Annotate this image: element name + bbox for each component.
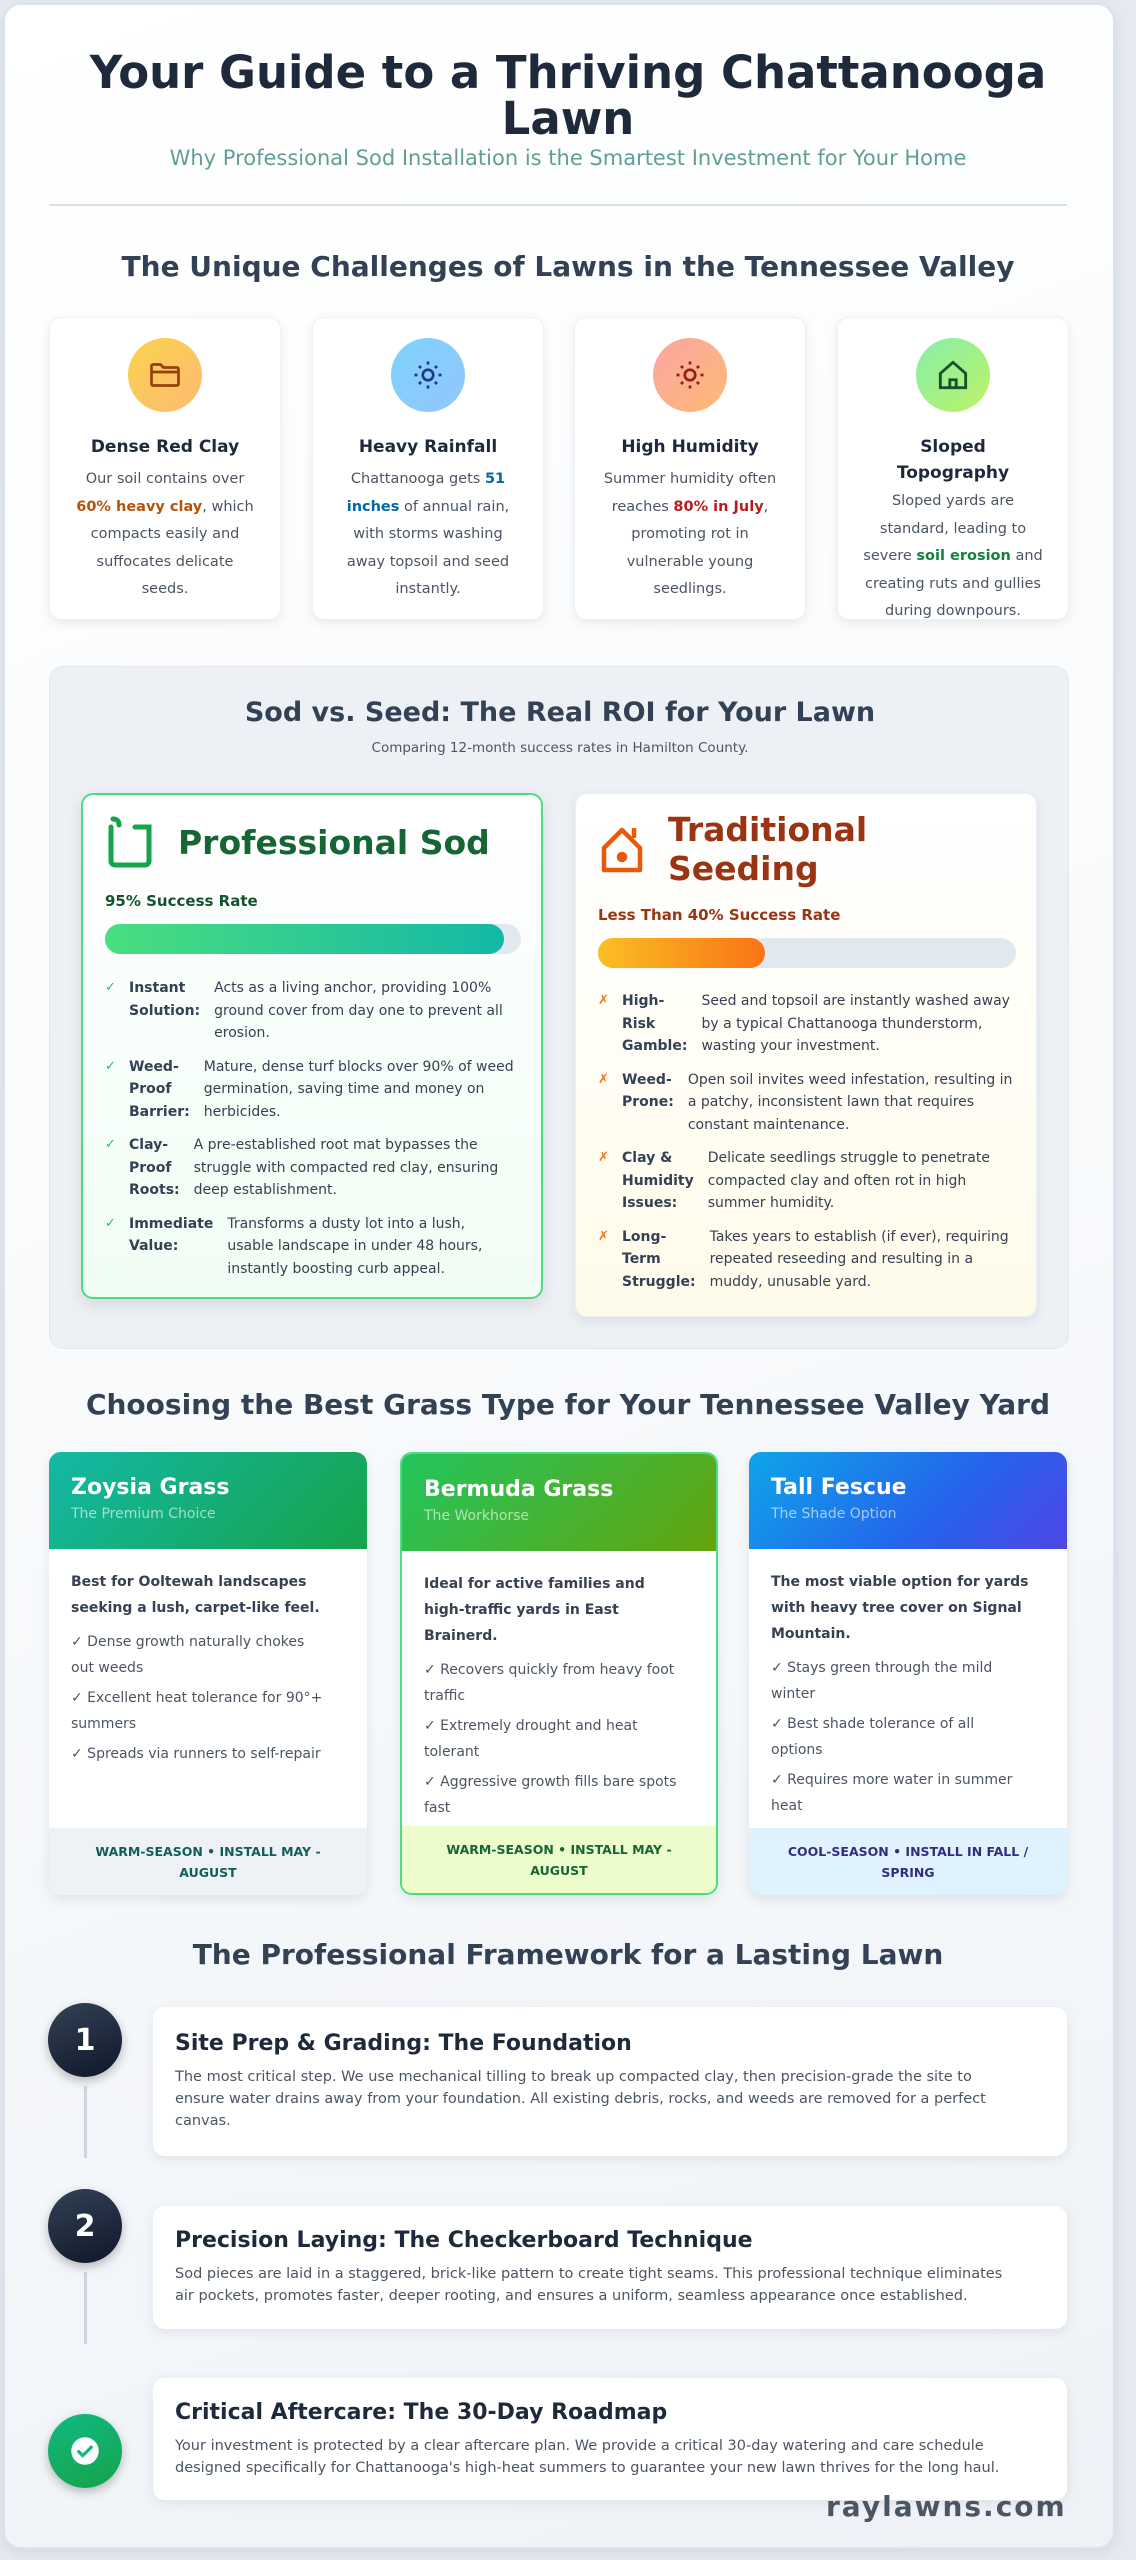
card: dense red clay: Our soil contains over 60% heavy clay, which compacts easily and suffocates delicate seeds.: [76, 471, 254, 597]
step 3 card: Critical Aftercare: The 30-Day Roadmap: [175, 2400, 667, 2425]
step 2 card: Sod pieces are laid in a staggered, brick-like pattern to create tight seams. This professional technique eliminates air pockets, promotes faster, deeper rooting, and ensures a uniform, seamless appearance once established.: [175, 2266, 1002, 2304]
title: [89, 46, 1046, 145]
card: professional sod: [81, 793, 543, 1299]
card: traditional seeding: [575, 793, 1037, 1317]
card: tall fescue: Tall Fescue: [771, 1475, 907, 1500]
sod list: Acts as a living anchor, providing 100% ground cover from day one to prevent all erosion.: [214, 980, 503, 1041]
card: tall fescue: The Shade Option: [771, 1506, 897, 1522]
seeding list: Struggle:: [622, 1274, 696, 1290]
card: bermuda: Ideal for active families and high-traffic yards in East Brainerd.: [424, 1576, 645, 1644]
sod bar: [105, 924, 521, 954]
sod list: ✓: [105, 1137, 116, 1152]
sod list: ✓: [105, 980, 116, 995]
step 3 card: Your investment is protected by a clear aftercare plan. We provide a critical 30-day watering and care schedule designed specifically for Chattanooga's high-heat summers to guarantee your new lawn thrives for the long haul.: [175, 2438, 999, 2476]
title: Lawn: [502, 92, 634, 145]
sod list: Immediate: [129, 1216, 213, 1232]
seeding list: Open soil invites weed infestation, resulting in a patchy, inconsistent lawn that requires constant maintenance.: [688, 1072, 1012, 1132]
card: zoysia: ✓ Dense growth naturally chokes out weeds: [71, 1634, 304, 1676]
brand: raylawns.com: [826, 2490, 1067, 2523]
sod rate: 95% Success Rate: [105, 892, 258, 910]
card: high humidity: [574, 317, 806, 620]
card: zoysia: ✓ Spreads via runners to self-repair: [71, 1746, 321, 1762]
heading: sod vs seed: Sod vs. Seed: The Real ROI for Your Lawn: [245, 697, 875, 728]
card: high humidity: Summer humidity often reaches 80% in July, promoting rot in vulnerable young seedlings.: [604, 471, 776, 597]
sod list: Weed-: [129, 1058, 179, 1074]
title: Your Guide to a Thriving Chattanooga: [90, 46, 1046, 99]
icon: house: [916, 338, 990, 412]
seeding list: Term: [622, 1251, 661, 1267]
step 2 card: [153, 2206, 1067, 2329]
card: bermuda: WARM-SEASON • INSTALL MAY - AUGUST: [446, 1842, 672, 1878]
sod list: Transforms a dusty lot into a lush, usable landscape in under 48 hours, instantly boosting curb appeal.: [227, 1216, 482, 1276]
subtitle: Why Professional Sod Installation is the Smartest Investment for Your Home: [170, 146, 966, 170]
step 1 card: The most critical step. We use mechanical tilling to break up compacted clay, then precision-grade the site to ensure water drains away from your foundation. All existing debris, rocks, and weeds are removed for a perfect canvas.: [175, 2069, 986, 2129]
heading: framework: The Professional Framework for a Lasting Lawn: [193, 1938, 943, 1971]
card: zoysia: [49, 1452, 367, 1895]
seeding list: ✗: [598, 1150, 609, 1165]
card: sloped topography: severe soil erosion and: [863, 548, 1043, 564]
card: tall fescue: ✓ Requires more water in summer heat: [771, 1772, 1012, 1814]
seeding list: Issues:: [622, 1195, 677, 1211]
card: zoysia: ✓ Excellent heat tolerance for 90°+ summers: [71, 1690, 322, 1732]
card: sloped topography: Sloped yards are: [892, 493, 1014, 509]
sod list: Mature, dense turf blocks over 90% of weed germination, saving time and money on herbicides.: [204, 1058, 514, 1120]
card: sloped topography: standard, leading to: [880, 520, 1026, 536]
card: heavy rainfall: Chattanooga gets 51 inches of annual rain, with storms washing away topsoil and seed instantly.: [347, 471, 509, 597]
card: tall fescue: ✓ Best shade tolerance of all options: [771, 1716, 974, 1758]
card: bermuda: Bermuda Grass: [424, 1477, 613, 1502]
sod list: Value:: [129, 1238, 178, 1254]
sod list: Proof: [129, 1081, 172, 1097]
card: bermuda: ✓ Aggressive growth fills bare spots fast: [424, 1774, 676, 1816]
seeding list: [598, 993, 1012, 1290]
seeding list: Humidity: [622, 1172, 694, 1188]
seeding list: ✗: [598, 1228, 609, 1244]
sod list: [105, 980, 514, 1276]
card: sloped topography: during downpours.: [885, 603, 1021, 619]
icon: sod: [108, 816, 152, 868]
card: dense red clay: Dense Red Clay: [91, 437, 239, 457]
seeding list: Delicate seedlings struggle to penetrate compacted clay and often rot in high summer humidity.: [708, 1150, 990, 1211]
card: zoysia: Zoysia Grass: [71, 1475, 230, 1500]
seeding list: Takes years to establish (if ever), requiring repeated reseeding and resulting in a muddy, unusable yard.: [710, 1228, 1009, 1290]
icon: folder: [128, 338, 202, 412]
sod list: Roots:: [129, 1182, 180, 1198]
step 1 card: Site Prep & Grading: The Foundation: [175, 2031, 632, 2056]
subheading: Comparing 12-month success rates in Hamilton County.: [372, 740, 748, 756]
seeding list: High-: [622, 993, 664, 1009]
heading: challenges: The Unique Challenges of Lawns in the Tennessee Valley: [122, 250, 1014, 283]
card: dense red clay: [49, 317, 281, 620]
seeding list: Clay &: [622, 1150, 672, 1166]
seeding rate: Less Than 40% Success Rate: [598, 906, 840, 924]
card: sloped topography: Topography: [897, 463, 1009, 483]
icon: seed house: [602, 828, 642, 872]
card: bermuda: ✓ Extremely drought and heat tolerant: [424, 1718, 638, 1760]
step 3 icon: check: [48, 2414, 122, 2488]
card: sloped topography: creating ruts and gullies: [865, 576, 1041, 592]
step 3 card: [153, 2378, 1067, 2500]
card: tall fescue: [749, 1452, 1067, 1895]
step 1 number: [48, 2003, 122, 2077]
seeding list: Weed-: [622, 1072, 672, 1088]
sod list: ✓: [105, 1216, 116, 1230]
card: zoysia: WARM-SEASON • INSTALL MAY - AUGUST: [95, 1844, 321, 1880]
seeding list: Risk: [622, 1016, 655, 1032]
sod list: ✓: [105, 1058, 116, 1074]
panel: sod vs seed: [49, 666, 1069, 1349]
card: bermuda: ✓ Recovers quickly from heavy foot traffic: [424, 1662, 674, 1704]
card: bermuda: [400, 1452, 718, 1895]
seeding bar: [598, 938, 1016, 968]
step 2 number: 2: [75, 2208, 95, 2244]
seeding list: Seed and topsoil are instantly washed away by a typical Chattanooga thunderstorm, wasting your investment.: [701, 993, 1010, 1054]
sod list: Instant: [129, 980, 185, 996]
sod list: Barrier:: [129, 1104, 190, 1120]
icon: sun: [653, 338, 727, 412]
sod list: Clay-: [129, 1137, 168, 1153]
step 1 number: 1: [75, 2022, 95, 2058]
card: sloped topography: Sloped: [920, 437, 986, 457]
card: zoysia: Best for Ooltewah landscapes seeking a lush, carpet-like feel.: [71, 1574, 320, 1616]
card: tall fescue: COOL-SEASON • INSTALL IN FALL / SPRING: [788, 1844, 1028, 1880]
card: high humidity: High Humidity: [621, 437, 759, 457]
card: zoysia: The Premium Choice: [71, 1506, 216, 1522]
step 1 card: [153, 2007, 1067, 2156]
seeding title: Seeding: [668, 849, 819, 888]
sod list: Solution:: [129, 1002, 200, 1018]
card: heavy rainfall: [312, 317, 544, 620]
card: tall fescue: The most viable option for yards with heavy tree cover on Signal Mountain.: [771, 1574, 1028, 1642]
seeding list: ✗: [598, 1072, 609, 1086]
sod title: Professional Sod: [178, 823, 490, 862]
step 2 number: [48, 2189, 122, 2263]
seeding list: Prone:: [622, 1094, 674, 1110]
step 2 card: Precision Laying: The Checkerboard Technique: [175, 2228, 753, 2253]
seeding list: ✗: [598, 993, 609, 1008]
seeding list: Long-: [622, 1228, 666, 1244]
card: bermuda: The Workhorse: [424, 1508, 529, 1524]
card: tall fescue: ✓ Stays green through the mild winter: [771, 1660, 992, 1702]
seeding title: [668, 810, 867, 888]
sod list: A pre-established root mat bypasses the struggle with compacted red clay, ensuring deep establishment.: [194, 1137, 498, 1198]
seeding list: Gamble:: [622, 1038, 687, 1054]
card: sloped topography: [837, 317, 1069, 620]
seeding title: Traditional: [668, 810, 867, 849]
heading: grass types: Choosing the Best Grass Type for Your Tennessee Valley Yard: [86, 1388, 1050, 1421]
sod list: Proof: [129, 1160, 172, 1176]
card: heavy rainfall: Heavy Rainfall: [359, 437, 497, 457]
icon: rain: [391, 338, 465, 412]
